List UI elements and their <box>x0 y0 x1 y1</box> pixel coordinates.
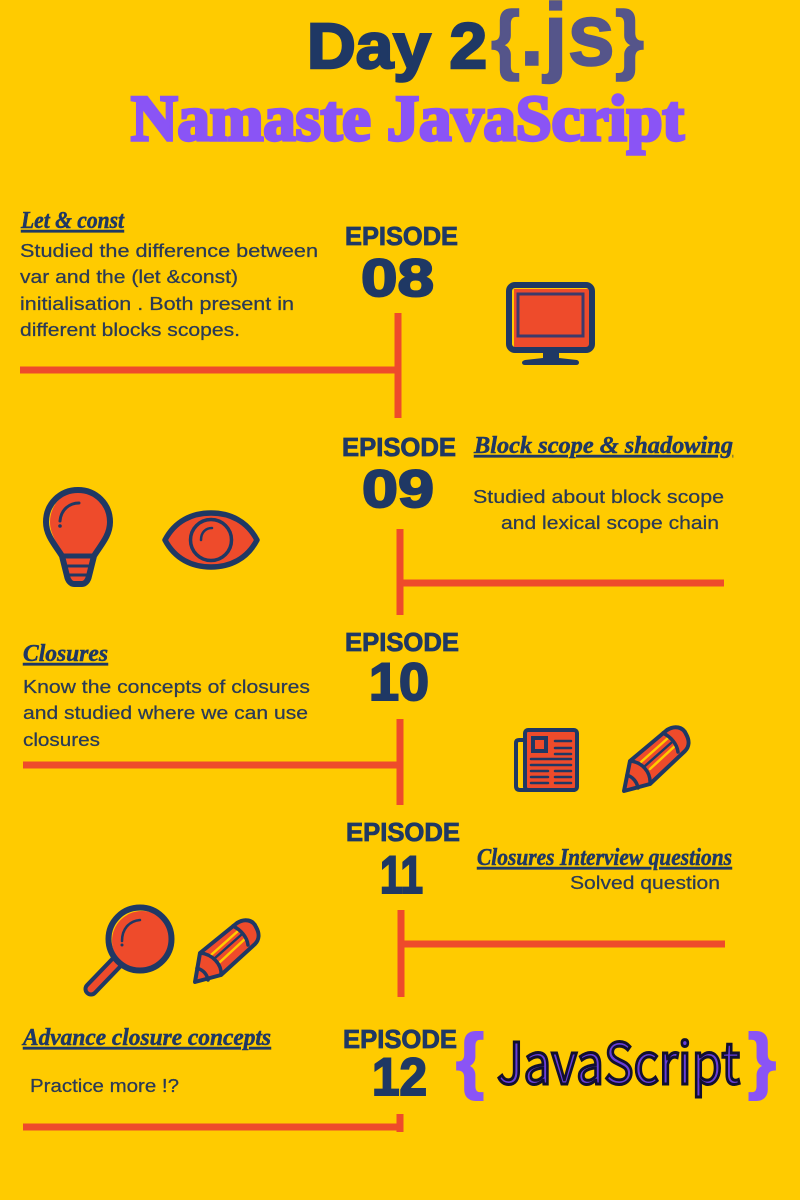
episode 08 heading: EPISODE <box>345 221 458 251</box>
episode 12 <box>21 1019 776 1132</box>
episode 08 description: var and the (let &const) <box>20 266 238 287</box>
episode 11 heading: EPISODE <box>346 817 460 847</box>
episode 12 title: Advance closure concepts <box>21 1025 271 1051</box>
episode 11 connector <box>401 910 725 997</box>
title: Day 2: Day 2 <box>307 10 487 82</box>
episode 08 number: 08 <box>361 249 434 308</box>
episode 09 description: Studied about block scope <box>473 486 724 507</box>
episode 11 title: Closures Interview questions <box>477 845 732 871</box>
episode 10 heading: EPISODE <box>345 627 459 657</box>
episode 09 number: 09 <box>362 460 434 519</box>
episode 08 <box>20 208 592 418</box>
episode 11 description: Solved question <box>570 872 720 893</box>
episode 08 description: initialisation . Both present in <box>20 293 294 314</box>
icon: eye <box>165 513 257 567</box>
episode 08 description: different blocks scopes. <box>20 319 240 340</box>
episode 08 description: Studied the difference between <box>20 240 318 261</box>
episode 09 description <box>473 486 724 533</box>
episode 09 <box>46 432 733 615</box>
episode 11 number: 11 <box>380 846 423 905</box>
episode 10 connector <box>23 719 400 805</box>
episode 11 <box>91 817 732 997</box>
episode 08 title: Let & const <box>20 208 125 234</box>
episode 08 connector <box>20 313 398 418</box>
icon: light bulb <box>46 490 110 584</box>
episode 10 title: Closures <box>23 641 108 667</box>
episode 10 description: Know the concepts of closures <box>23 676 310 697</box>
episode 09 title: Block scope & shadowing <box>473 433 733 459</box>
episode 10 description: and studied where we can use <box>23 702 308 723</box>
episode 12 number: 12 <box>372 1048 427 1107</box>
subtitle: Namaste JavaScript: Namaste JavaScript <box>131 83 684 155</box>
episode 10 description <box>23 676 310 750</box>
episode 12 heading: EPISODE <box>343 1024 457 1054</box>
JavaScript logo: } <box>748 1020 776 1101</box>
episode 09 heading: EPISODE <box>342 432 456 462</box>
icon: magnifying glass <box>91 908 172 989</box>
JavaScript logo: { <box>456 1020 484 1101</box>
episode 08 description <box>20 240 318 340</box>
episode 12 connector <box>23 1114 402 1132</box>
icon: newspaper <box>516 730 577 790</box>
episode 10 description: closures <box>23 729 100 750</box>
episode 09 description: and lexical scope chain <box>501 512 719 533</box>
JavaScript logo: JavaScript <box>497 1019 740 1101</box>
icon: monitor <box>509 285 592 365</box>
episode 10 <box>23 627 689 805</box>
icon: pencil <box>624 727 689 791</box>
episode 10 number: 10 <box>369 653 429 712</box>
episode 12 description: Practice more !? <box>30 1075 179 1096</box>
icon: pencil <box>195 920 259 982</box>
episode 09 connector <box>400 529 724 615</box>
